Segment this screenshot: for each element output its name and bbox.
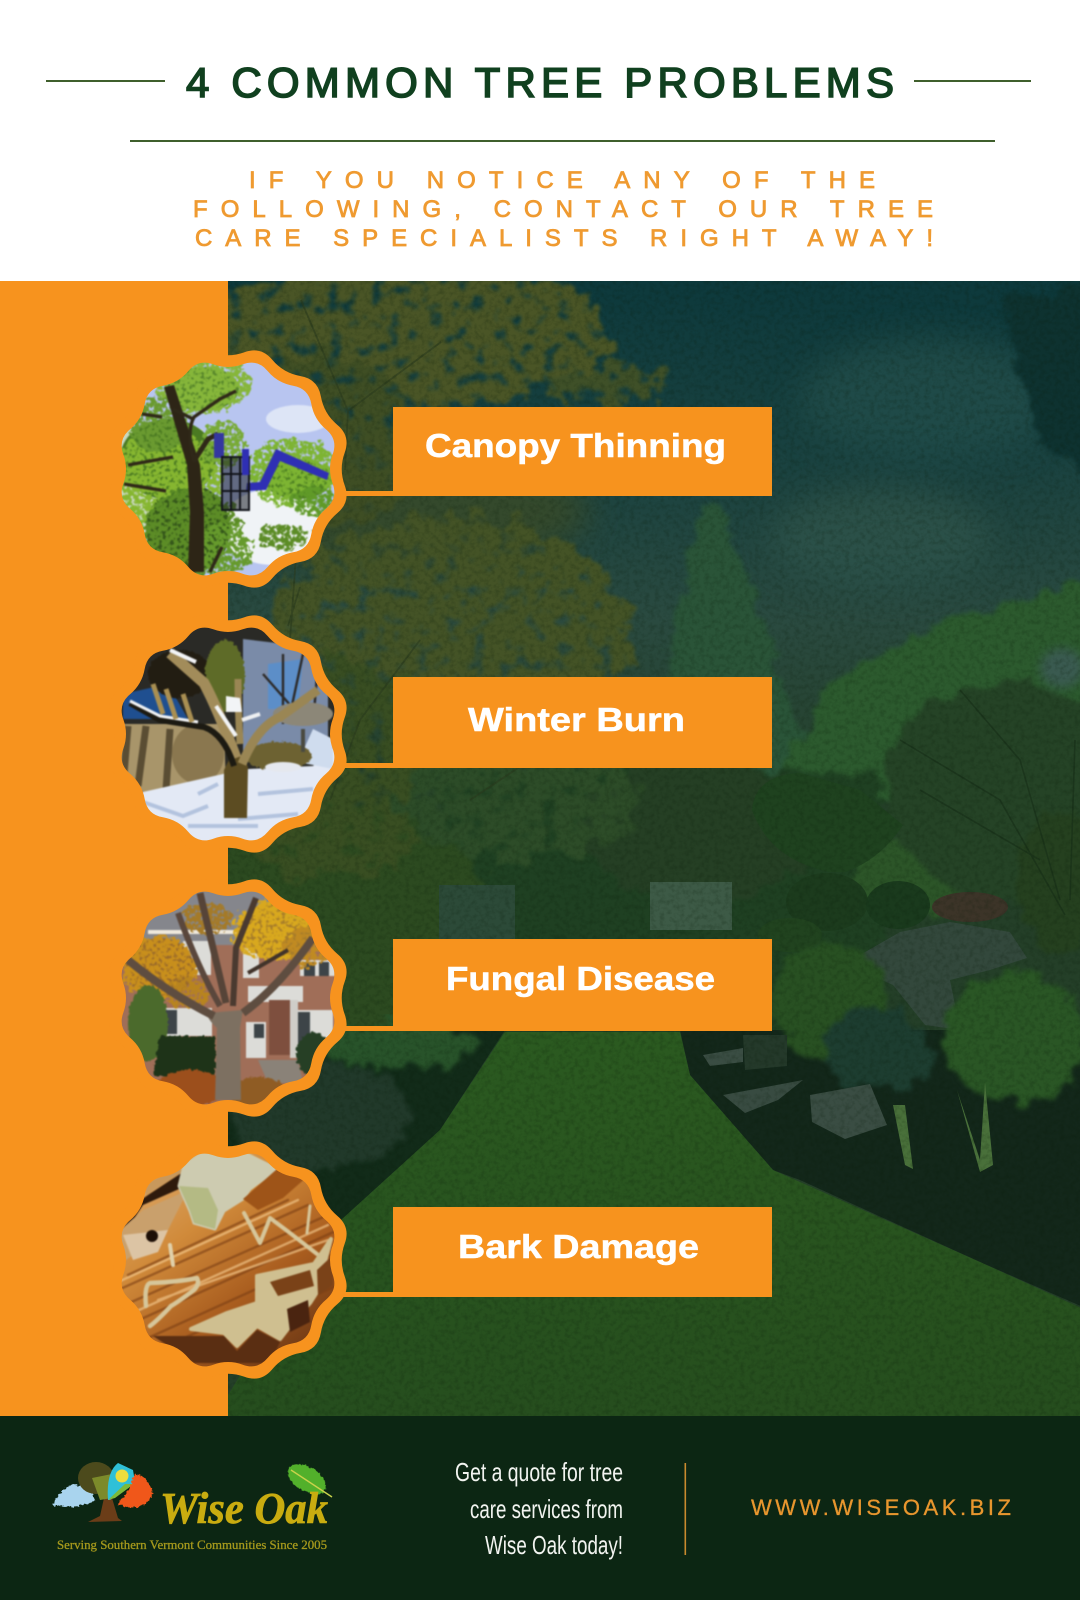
distant trees [670, 503, 808, 778]
call to action text [455, 1457, 623, 1560]
header panel [0, 0, 1080, 281]
maple branches [900, 690, 1075, 915]
label: Bark Damage [458, 1228, 699, 1265]
dark maple [885, 680, 1080, 900]
item: winter burn [109, 615, 772, 853]
left garden bed [228, 1031, 504, 1220]
website: WWW.WISEOAK.BIZ [751, 1495, 1011, 1520]
stones [703, 1035, 887, 1139]
subtitle: IF YOU NOTICE ANY OF THE [249, 167, 875, 194]
green hillside [780, 580, 1080, 800]
background garden scene [190, 260, 1080, 1420]
connector and label box [340, 1207, 772, 1297]
logo tagline: Serving Southern Vermont Communities Since 2005 [57, 1537, 327, 1552]
photo: snowy tree and fence [122, 628, 334, 840]
topiary [848, 812, 1008, 929]
subtitle: CARE SPECIALISTS RIGHT AWAY! [195, 225, 933, 252]
photo: autumn tree in front of brick house [122, 892, 334, 1104]
footer divider [684, 1463, 686, 1555]
title side rule right [914, 80, 1031, 82]
iris plants [893, 1082, 993, 1172]
icon: seasonal oak tree [53, 1462, 153, 1522]
orange side column [0, 281, 228, 1416]
subtitle: FOLLOWING, CONTACT OUR TREE [193, 196, 933, 223]
canopy branches [288, 300, 519, 800]
scalloped badge [109, 350, 347, 588]
scalloped badge [109, 879, 347, 1117]
title: 4 COMMON TREE PROBLEMS [186, 59, 894, 106]
right garden bed [680, 1030, 1080, 1310]
icon: oak leaf [283, 1458, 332, 1500]
garden rock [860, 922, 1027, 1030]
spruce tint [1040, 648, 1080, 688]
photo: bark with beetle galleries [122, 1154, 334, 1366]
light shrub behind topiary [852, 838, 960, 920]
footer panel [0, 1416, 1080, 1600]
logo [53, 1458, 332, 1552]
call to action text: Get a quote for tree [455, 1457, 623, 1487]
mid woods [440, 770, 880, 1050]
photo: tree being thinned from a lift [122, 362, 334, 576]
call to action text: Wise Oak today! [485, 1530, 623, 1560]
logo wordmark: Wise Oak [160, 1484, 328, 1533]
scalloped badge [109, 1141, 347, 1379]
item: bark damage [109, 1141, 772, 1379]
right shrubs [772, 942, 1080, 1102]
scalloped badge [109, 615, 347, 853]
yellow canopies [228, 281, 670, 882]
call to action text: care services from [470, 1494, 623, 1524]
label: Winter Burn [468, 701, 685, 738]
title side rule left [46, 80, 165, 82]
foliage mottling [228, 281, 1080, 1416]
connector and label box [340, 677, 772, 768]
lawn [228, 1032, 1080, 1420]
fence [439, 882, 732, 940]
subtitle [193, 167, 933, 252]
label: Fungal Disease [446, 960, 715, 997]
label: Canopy Thinning [425, 427, 726, 464]
header divider [130, 140, 995, 142]
item: fungal disease [109, 879, 772, 1117]
item: canopy thinning [108, 350, 772, 588]
connector and label box [340, 939, 772, 1031]
connector and label box [340, 407, 772, 496]
